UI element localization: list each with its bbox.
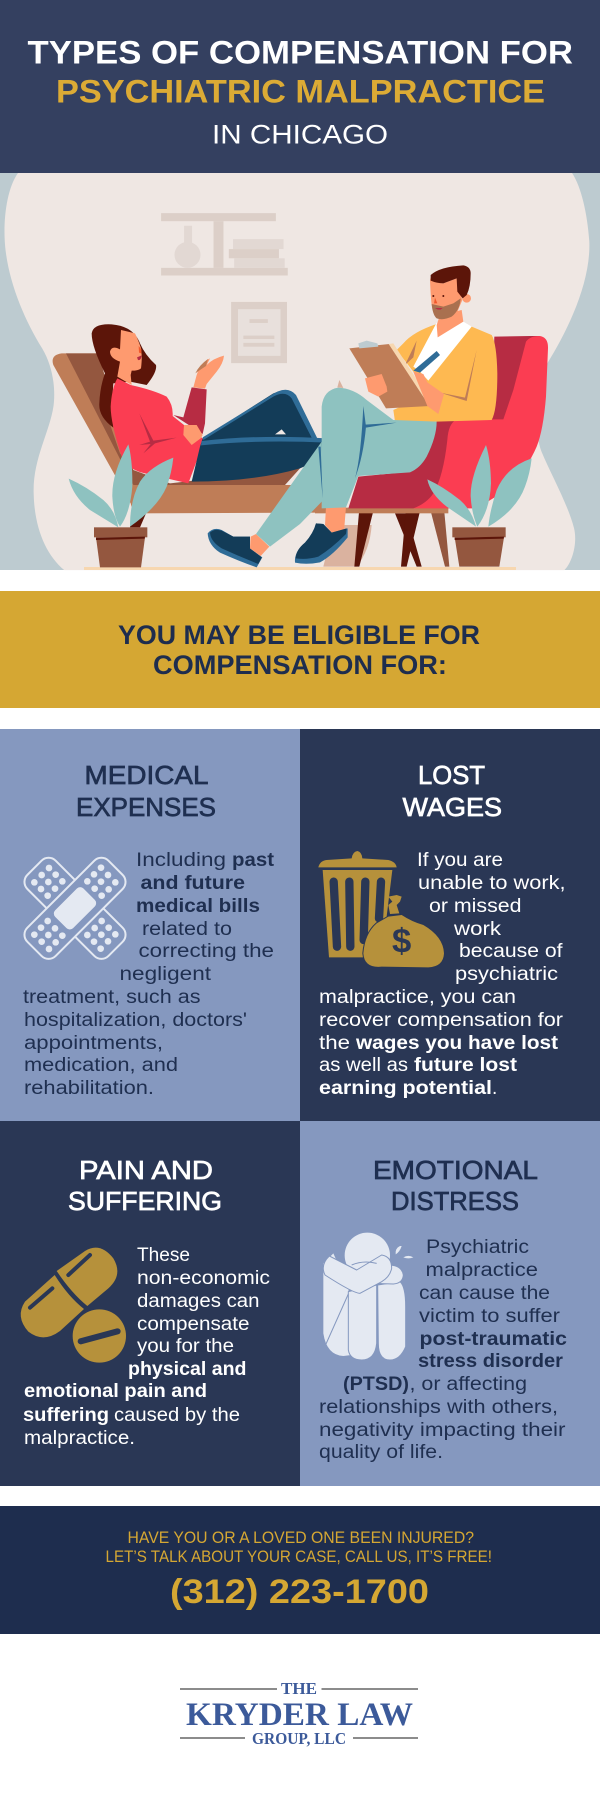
body text: lost wages: recover compensation for xyxy=(319,1010,564,1031)
lower hand xyxy=(183,425,203,445)
body text: lost wages: wages you have lost xyxy=(355,1033,559,1054)
framed certificate xyxy=(231,302,287,363)
body text: pain and suffering: emotional pain and xyxy=(24,1381,207,1402)
hair xyxy=(92,324,156,428)
hands xyxy=(365,374,387,397)
face xyxy=(110,330,142,385)
body text: medical expenses: negligent xyxy=(120,964,212,985)
heading: pain and suffering: SUFFERING xyxy=(68,1186,222,1216)
left potted plant xyxy=(69,444,173,567)
body text: medical expenses: medical bills xyxy=(136,896,260,917)
icon: crossed bandages xyxy=(20,854,130,963)
body text: emotional distress: Psychiatric xyxy=(426,1237,529,1258)
jeans xyxy=(192,391,327,482)
body text: lost wages: psychiatric xyxy=(455,964,558,985)
body text: medical expenses xyxy=(23,850,275,1099)
ankle and shoe xyxy=(325,507,346,533)
icon: pills xyxy=(21,1248,126,1363)
body text: lost wages: because of xyxy=(459,941,563,962)
trousers xyxy=(256,442,323,547)
body text: pain and suffering: physical and xyxy=(128,1359,246,1380)
banner text: COMPENSATION FOR: xyxy=(153,650,447,680)
shirt xyxy=(393,324,497,422)
title line 1: TYPES OF COMPENSATION FOR xyxy=(28,34,573,70)
body text: lost wages: earning potential xyxy=(319,1078,492,1099)
body text: pain and suffering: suffering xyxy=(23,1405,109,1426)
floor line xyxy=(84,567,516,570)
heading: pain and suffering xyxy=(68,1155,222,1216)
body text: medical expenses: related to xyxy=(142,919,232,940)
body text: pain and suffering: These xyxy=(137,1245,190,1266)
body text: lost wages: unable to work, xyxy=(418,873,566,894)
body text: pain and suffering: damages can xyxy=(137,1291,260,1312)
body text: pain and suffering: compensate xyxy=(137,1314,250,1335)
eligibility banner xyxy=(0,591,600,708)
body text: emotional distress xyxy=(319,1237,567,1463)
body text: medical expenses: rehabilitation. xyxy=(24,1078,154,1099)
body text: emotional distress: post-traumatic xyxy=(420,1329,567,1350)
body text: medical expenses: correcting the xyxy=(138,941,274,962)
body text: emotional distress: quality of life. xyxy=(319,1442,443,1463)
body text: lost wages: or missed xyxy=(429,896,522,917)
room background blob xyxy=(4,173,589,570)
chaise lounge xyxy=(53,353,340,527)
pen xyxy=(413,351,440,373)
body text: lost wages: as well as xyxy=(319,1055,408,1076)
armchair xyxy=(315,336,548,567)
sleeve xyxy=(173,387,207,434)
shoe xyxy=(208,529,262,567)
banner text: YOU MAY BE ELIGIBLE FOR xyxy=(118,620,480,650)
body text: pain and suffering: malpractice. xyxy=(24,1428,135,1449)
body text: emotional distress: negativity impacting their xyxy=(319,1420,566,1441)
body text: lost wages: malpractice, you can xyxy=(319,987,516,1008)
body text: medical expenses: appointments, xyxy=(24,1033,163,1054)
body text: pain and suffering: you for the xyxy=(137,1336,234,1357)
body text: medical expenses: treatment, such as xyxy=(23,987,200,1008)
clipboard xyxy=(349,344,430,408)
icon: person hugging knees xyxy=(323,1233,413,1360)
logo: The Kryder Law Group, LLC: KRYDER LAW xyxy=(186,1697,413,1733)
logo: The Kryder Law Group, LLC xyxy=(180,1679,418,1748)
icon: trash can and money bag xyxy=(318,851,444,967)
body text: medical expenses: Including xyxy=(136,850,226,871)
body text: emotional distress: (PTSD) xyxy=(343,1374,409,1395)
woman patient xyxy=(92,324,327,567)
body text: lost wages: If you are xyxy=(417,850,503,871)
panel: lost wages xyxy=(300,729,600,1121)
call to action bar xyxy=(0,1506,600,1634)
body text: emotional distress: can cause the xyxy=(419,1283,550,1304)
head xyxy=(462,294,471,303)
body text: lost wages: . xyxy=(492,1078,497,1099)
wall shelf with flask and books xyxy=(161,213,288,276)
man therapist xyxy=(256,265,497,564)
icon: trash can and money bag: $ xyxy=(392,922,411,960)
heading: emotional distress xyxy=(373,1155,538,1216)
body text: emotional distress: relationships with others, xyxy=(319,1397,558,1418)
title line 3: IN CHICAGO xyxy=(212,120,388,150)
body text: medical expenses: medication, and xyxy=(24,1055,178,1076)
heading: pain and suffering: PAIN AND xyxy=(79,1155,213,1185)
body text: lost wages: the xyxy=(319,1033,350,1054)
body text: emotional distress: victim to suffer xyxy=(419,1306,561,1327)
body text: medical expenses: and future xyxy=(140,873,245,894)
heading: emotional distress: DISTRESS xyxy=(391,1186,519,1216)
logo: The Kryder Law Group, LLC: GROUP, LLC xyxy=(252,1729,346,1748)
body text: medical expenses: hospitalization, doctors' xyxy=(24,1010,247,1031)
body text: medical expenses: past xyxy=(232,850,275,871)
body text: emotional distress: stress disorder xyxy=(418,1351,564,1372)
body text: lost wages xyxy=(319,850,566,1099)
logo: The Kryder Law Group, LLC: THE xyxy=(281,1679,317,1698)
heading: medical expenses: MEDICAL xyxy=(84,760,208,790)
body text: pain and suffering xyxy=(23,1245,270,1449)
heading: medical expenses: EXPENSES xyxy=(76,792,216,822)
illustration: therapy session xyxy=(0,173,600,570)
panel: pain and suffering xyxy=(0,1121,300,1486)
title line 2: PSYCHIATRIC MALPRACTICE xyxy=(56,74,545,110)
heading: medical expenses xyxy=(76,760,216,822)
sweater xyxy=(111,378,203,483)
header panel xyxy=(0,0,600,173)
heading: lost wages: WAGES xyxy=(402,792,502,822)
call to action text: LET’S TALK ABOUT YOUR CASE, CALL US, IT’S FREE! xyxy=(106,1548,492,1566)
heading: lost wages: LOST xyxy=(418,760,485,790)
body text: lost wages: future lost xyxy=(414,1055,518,1076)
banner text xyxy=(118,620,480,680)
panel: emotional distress xyxy=(300,1121,600,1486)
body text: pain and suffering: caused by the xyxy=(114,1405,240,1426)
heading: lost wages xyxy=(402,760,502,822)
body text: lost wages: work xyxy=(453,919,502,940)
right potted plant xyxy=(427,445,532,567)
body text: emotional distress: , or affecting xyxy=(410,1374,527,1395)
body text: pain and suffering: non-economic xyxy=(137,1268,270,1289)
call to action text: HAVE YOU OR A LOVED ONE BEEN INJURED? xyxy=(128,1529,474,1547)
call to action text xyxy=(106,1529,492,1566)
phone number: (312) 223-1700 xyxy=(170,1573,429,1611)
raised hand xyxy=(193,356,224,389)
panel: medical expenses xyxy=(0,729,300,1121)
body text: emotional distress: malpractice xyxy=(426,1260,538,1281)
heading: emotional distress: EMOTIONAL xyxy=(373,1155,538,1185)
